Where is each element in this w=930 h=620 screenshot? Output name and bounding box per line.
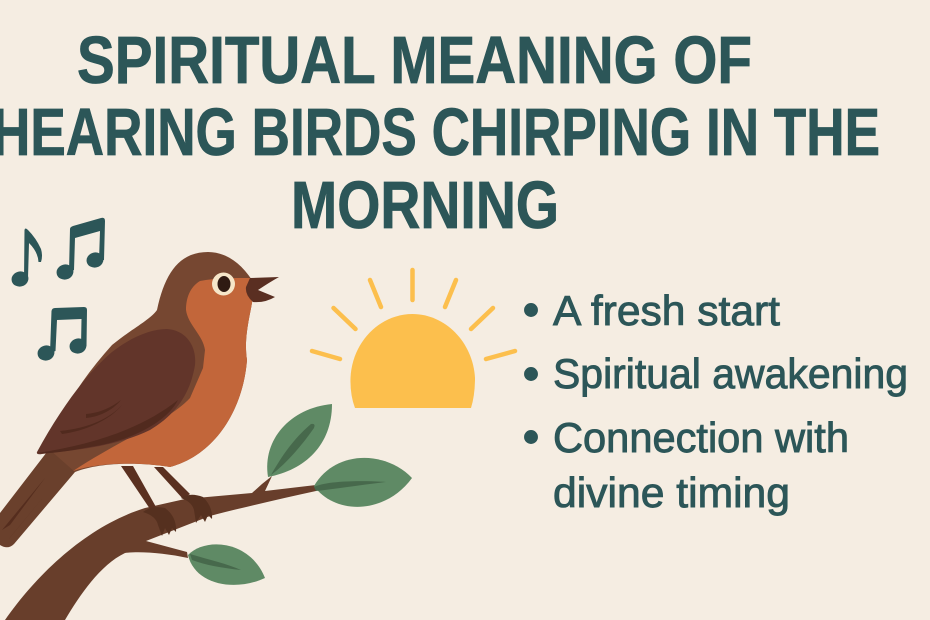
bullet list bbox=[524, 287, 908, 516]
sun rays bbox=[312, 270, 515, 359]
legs bbox=[121, 466, 190, 509]
icon: music notes bbox=[10, 218, 105, 362]
feet bbox=[143, 495, 212, 536]
eye bbox=[212, 272, 235, 296]
icon: bird bbox=[0, 252, 279, 547]
wing bbox=[37, 329, 195, 454]
head and back bbox=[50, 252, 253, 472]
bullet: connection with divine timing: Connection with bbox=[553, 414, 849, 461]
tail bbox=[0, 448, 100, 547]
icon: branch with leaves bbox=[5, 404, 412, 620]
beak bbox=[246, 277, 279, 302]
bullet: connection with divine timing: divine timing bbox=[553, 469, 790, 516]
leaf right bbox=[314, 458, 412, 507]
title: SPIRITUAL MEANING OF bbox=[77, 23, 752, 98]
bullet: a fresh start: A fresh start bbox=[553, 287, 780, 334]
icon: double note bottom bbox=[36, 307, 88, 362]
wing feathers bbox=[37, 400, 178, 453]
tail feathers bbox=[2, 478, 45, 540]
orange breast bbox=[73, 278, 253, 471]
leaf top bbox=[267, 404, 332, 477]
bullet: spiritual awakening: Spiritual awakening bbox=[553, 350, 908, 397]
leaf bottom bbox=[188, 544, 265, 585]
sun disc bbox=[350, 314, 475, 408]
icon: sun bbox=[312, 270, 515, 408]
icon: single note bbox=[10, 228, 42, 288]
bullet: connection with divine timing bbox=[524, 414, 849, 516]
title bbox=[0, 23, 880, 243]
icon: double note top bbox=[55, 218, 105, 281]
title: MORNING bbox=[291, 168, 559, 243]
branch bbox=[5, 476, 316, 620]
